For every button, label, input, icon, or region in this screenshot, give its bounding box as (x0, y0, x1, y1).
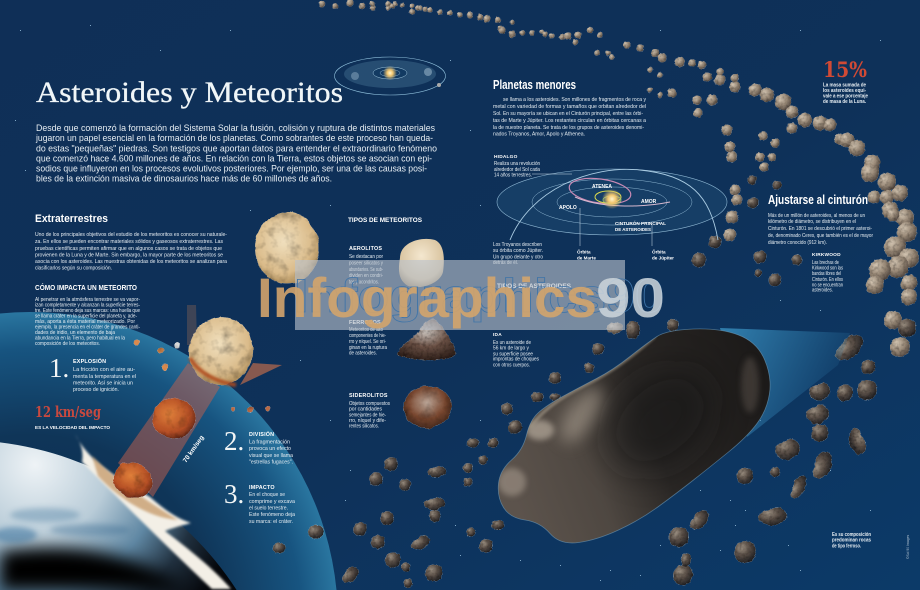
step 2: division: provoca un efecto (249, 446, 291, 452)
meteor trail (118, 305, 282, 497)
panel: tipos de meteoritos: tos y acondritos. (349, 280, 379, 286)
text: Planetas menores: se llama a los asteroides. Son millones de fragmentos de roca y (503, 97, 646, 103)
panel: tipos de meteoritos (348, 217, 423, 430)
panel: tipos de asteroides: 56 km de largo y (493, 346, 529, 352)
step 3: impact: En el choque se (249, 492, 285, 498)
stat: 12 km/seg: ES LA VELOCIDAD DEL IMPACTO (35, 425, 110, 430)
meteorites (107, 212, 319, 505)
panel: tipos de meteoritos: SIDEROLITOS (349, 393, 388, 399)
Earth with impact (0, 434, 237, 590)
heading: Cómo impacta un meteorito: CÓMO IMPACTA UN METEORITO (35, 283, 138, 292)
text: Extraterrestres: provienen de la Luna y de Marte. Sin embargo, la mayor parte de los meteoritos se (35, 252, 223, 258)
panel: tipos de meteoritos: Meteoritos de alto (349, 327, 383, 333)
panel: tipos de meteoritos: Objetos compuestos (349, 401, 390, 407)
label: 70 km/seg: 70 km/seg (182, 434, 206, 464)
step 3: impact: comprime y excava (249, 499, 296, 505)
text: Extraterrestres: clasificarlos según su composición. (35, 266, 112, 272)
panel: tipos de meteoritos: rentes silicatos. (349, 424, 379, 430)
note: composición: Es su composición (832, 532, 871, 538)
mini solar system (334, 57, 446, 95)
text: Ajustarse al cinturón: de, denominado Ceres, que también es el de mayor (768, 233, 873, 239)
stat: 15%: 15% (823, 57, 867, 82)
panel: tipos de asteroides: improntas de choques (493, 356, 539, 362)
asteroid Ida (498, 329, 770, 543)
step 2: division: 2. (224, 426, 244, 456)
orbit diagram: Órbita (577, 248, 591, 254)
step 3: impact: el suelo terrestre. (249, 506, 288, 512)
step 1: explosion: La fricción con el aire au- (73, 367, 135, 373)
watermark: 90 (596, 266, 665, 329)
panel: tipos de asteroides: TIPOS DE ASTEROIDES (497, 283, 572, 290)
stat: 12 km/seg: 12 km/seg (35, 403, 101, 421)
step 2: division: La fragmentación (249, 440, 290, 446)
intro text: jugaron un papel esencial en la formación de los planetas. Como sobrantes de este proceso han queda- (35, 133, 433, 143)
panel: tipos de meteoritos: rro y níquel. Se ori- (349, 339, 386, 345)
step 1: explosion (49, 353, 136, 393)
panel: tipos de meteoritos: Se destacan por (349, 254, 383, 260)
text: Cómo impacta: izan completamente y alcanzan la superficie terres- (35, 302, 140, 308)
stat: 15%: de masa de la Luna. (823, 99, 866, 105)
orbit diagram: AMOR (641, 199, 657, 205)
intro text: do estas "pequeñas" piedras. Son testigos que aportan datos para entender el extraordinario fenómeno (36, 144, 437, 154)
orbit diagram: APOLO (559, 205, 577, 211)
note: Troyanos (493, 242, 543, 266)
step 1: explosion: 1. (49, 353, 69, 383)
intro text: que comenzó hace 4.600 millones de años. En relación con la Tierra, estos objetos se asocian con epi- (36, 154, 432, 164)
panel: tipos de meteoritos: de asteroides. (349, 350, 377, 356)
text: Extraterrestres: Uno de los principales objetivos del estudio de los meteoritos es conocer su naturale- (35, 232, 227, 238)
note: Hidalgo: 14 años terrestres. (494, 172, 532, 178)
intro text: Desde que comenzó la formación del Sistema Solar la fusión, colisión y ruptura de distintos materiales (36, 123, 435, 133)
panel: tipos de meteoritos: por cantidades (349, 406, 382, 412)
rock: siderolito (403, 386, 451, 428)
text: Cómo impacta: dades de iridio, un elemento de baja (35, 330, 115, 336)
text: Cómo impacta: composición de los meteoritos. (35, 341, 100, 347)
step 3: impact: 3. (224, 479, 244, 509)
note: Troyanos: Los Troyanos describen (493, 242, 542, 248)
heading: Planetas menores: Planetas menores (493, 77, 576, 92)
step 3: impact: Este fenómeno deja (249, 512, 296, 518)
note: composición: de tipo ferroso. (832, 544, 861, 550)
note: Kirkwood (812, 252, 843, 294)
stat: 15%: vale a ese porcentaje (823, 94, 868, 100)
orbit diagram: DE ASTEROIDES (615, 227, 652, 233)
step 1: explosion: menta la temperatura en el (73, 374, 136, 380)
intro text (35, 123, 437, 184)
note: composición (832, 532, 871, 550)
orbit diagram (497, 169, 727, 260)
panel: tipos de meteoritos: ginan en la ruptura (349, 345, 387, 351)
text: Planetas menores: tas de Marte y Júpiter. Los restantes circulan en órbitas cercanas a (493, 118, 646, 124)
rock: ferroso (397, 319, 456, 360)
orbit diagram: de Marte (577, 256, 596, 260)
text: Ajustarse al cinturón: Cinturón. En 1801 se descubrió el primer asteroi- (768, 226, 872, 232)
text: Ajustarse al cinturón: diámetro conocido (912 km). (768, 240, 827, 246)
step 3: impact (224, 479, 296, 525)
text: Extraterrestres: za. En ellos se pueden encontrar materiales sólidos y gaseosos extraterrestres. Las (35, 239, 223, 245)
panel: tipos de meteoritos: TIPOS DE METEORITOS (348, 217, 423, 224)
text: Extraterrestres: pruebas científicas permiten afirmar que en algunos casos se trata de objetos que (35, 246, 222, 252)
text: Extraterrestres (35, 232, 227, 272)
note: Kirkwood: no se encuentran (812, 282, 843, 288)
step 2: division: visual que se llama (249, 453, 294, 459)
text: Cómo impacta (35, 297, 140, 347)
note: Kirkwood: Kirkwood son las (812, 266, 843, 272)
note: Kirkwood: KIRKWOOD (812, 252, 841, 258)
panel: tipos de meteoritos: AEROLITOS (349, 246, 382, 252)
stat: 15% (823, 57, 868, 105)
panel: tipos de meteoritos: componentes de hie- (349, 333, 386, 339)
note: Kirkwood: bandas libres del (812, 271, 841, 277)
note: Troyanos: detrás de él. (493, 260, 518, 266)
title: Asteroides y Meteoritos (36, 76, 343, 109)
panel: tipos de meteoritos: FERROSOS (349, 320, 381, 326)
panel: tipos de asteroides: Es un asteroide de (493, 340, 531, 346)
step 2: division: "estrellas fugaces". (249, 460, 293, 466)
panel: tipos de asteroides: IDA (493, 332, 502, 338)
note: composición: predominan rocas (832, 538, 871, 544)
note: Hidalgo (494, 154, 540, 178)
text: Cómo impacta: Al penetrar en la atmósfera terrestre se va vapor- (35, 297, 140, 303)
watermark: Infographics (257, 266, 597, 329)
step 2: division (224, 426, 294, 466)
intro text: bles de la extinción masiva de dinosaurios hace más de 60 millones de años. (36, 174, 332, 184)
note: Hidalgo: HIDALGO (494, 154, 518, 160)
panel: tipos de meteoritos: poseer silicatos y (349, 260, 383, 266)
step 2: division: DIVISIÓN (249, 430, 274, 438)
text: Ajustarse al cinturón: Más de un millón de asteroides, al menos de un (768, 213, 865, 219)
text: Cómo impacta: abundancia en la Tierra, pero habitual en la (35, 336, 125, 342)
note: Hidalgo: Realiza una revolución (494, 161, 540, 167)
panel: tipos de asteroides: con otros cuerpos. (493, 362, 530, 368)
note: Kirkwood: Las brechas de (812, 260, 839, 266)
text: Ajustarse al cinturón: kilómetro de diámetro, se distribuyen en el (768, 219, 856, 225)
text: Planetas menores (493, 97, 646, 138)
text: Planetas menores: la de nuestro planeta. Se trata de los grupos de asteroides denomi- (493, 125, 644, 131)
panel: tipos de asteroides: su superficie posee (493, 352, 533, 358)
stat: 15%: los asteroides equi- (823, 88, 866, 94)
text: Cómo impacta: se llama cráter en la superficie del planeta y, ade- (35, 314, 137, 320)
step 1: explosion: proceso de ignición. (73, 387, 119, 393)
text: Planetas menores: metal con variedad de formas y tamaños que orbitan alrededor del (493, 104, 646, 110)
stat: 12 km/seg (35, 403, 110, 430)
note: Kirkwood: asteroides. (812, 288, 833, 294)
orbit diagram: Órbita (652, 248, 666, 254)
heading: Extraterrestres: Extraterrestres (35, 213, 108, 225)
panel: tipos de meteoritos: abundantes. Se sub- (349, 267, 383, 273)
copyright: ©Sol 90 Images (906, 535, 910, 559)
text: Planetas menores: Sol. En su mayoría se ubican en el Cinturón principal, entre las órbi- (493, 111, 643, 117)
panel: tipos de meteoritos: rro, níquel y dife- (349, 418, 386, 424)
text: Cómo impacta: tre. Este fenómeno deja sus marcas: una huella que (35, 308, 140, 314)
step 3: impact: IMPACTO (249, 485, 275, 491)
stat: 15%: La masa sumada de (823, 82, 866, 88)
text: Cómo impacta: ejemplo, la presencia en el cráter de grandes canti- (35, 324, 140, 330)
watermark: Infographics90 (294, 269, 664, 322)
text: Planetas menores: nados Troyanos, Amor, Apolo y Athenea. (493, 132, 585, 138)
rock: aerolito (399, 239, 444, 287)
orbit diagram: ATENEA (592, 184, 612, 190)
step 1: explosion: EXPLOSIÓN (73, 357, 106, 365)
impact shockwave (75, 434, 231, 589)
note: Troyanos: Un grupo delante y otro (493, 254, 543, 260)
light cone behind Ida (720, 328, 850, 437)
heading: Ajustarse al cinturón: Ajustarse al cinturón (768, 192, 868, 207)
panel: tipos de meteoritos: dividen en condri- (349, 273, 383, 279)
orbit diagram: de Júpiter (652, 256, 674, 260)
note: Troyanos: su órbita como Júpiter. (493, 248, 543, 254)
text: Cómo impacta: más, aporta a ésta material meteorizado. Por (35, 319, 135, 325)
asteroid belt stream (273, 0, 919, 587)
step 3: impact: su marca: el cráter. (249, 519, 293, 525)
intro text: sodios que influyeron en los procesos evolutivos posteriores. Por ejemplo, ser una de las causas posi- (36, 164, 427, 174)
note: Kirkwood: Cinturón. En ellos (812, 277, 843, 283)
panel: tipos de meteoritos: semejantes de hie- (349, 412, 386, 418)
step 1: explosion: meteorito. Así se inicia un (73, 380, 133, 386)
text: Ajustarse al cinturón (768, 213, 873, 246)
orbit diagram: CINTURÓN PRINCIPAL (615, 219, 666, 227)
text: Extraterrestres: asocia con los asteroides. Las muestras obtenidas de los meteoritos se analizan para (35, 259, 227, 265)
note: Hidalgo: alrededor del Sol cada (494, 167, 540, 173)
panel: tipos de asteroides (493, 283, 572, 368)
atmosphere of the Earth (0, 312, 336, 590)
